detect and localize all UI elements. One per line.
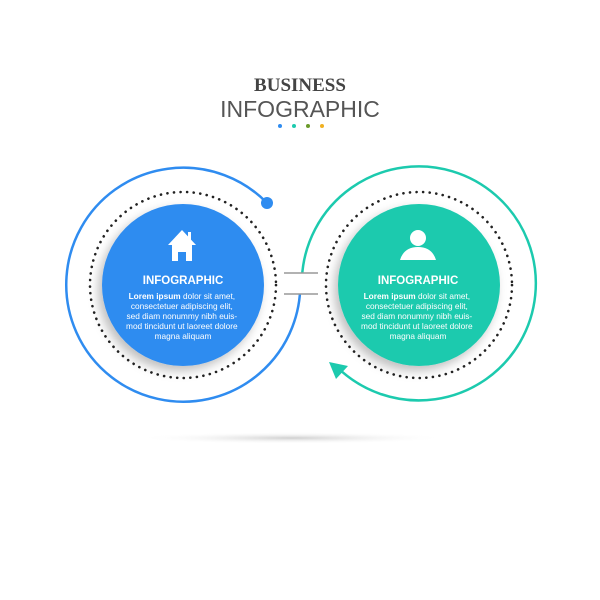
title: INFOGRAPHIC — [220, 96, 380, 122]
dotted ring left — [90, 192, 276, 378]
panel: right teal circle — [338, 204, 500, 366]
dotted ring right — [326, 192, 512, 378]
text block right: mod tincidunt ut laoreet dolore — [361, 321, 473, 331]
text block right: Lorem ipsum dolor sit amet, — [364, 291, 470, 301]
connector — [284, 273, 318, 294]
text block right: magna aliquam — [390, 331, 446, 341]
text block left: magna aliquam — [155, 331, 211, 341]
icon: house — [168, 230, 196, 261]
panel: left blue circle — [102, 204, 264, 366]
text block left: mod tincidunt ut laoreet dolore — [126, 321, 238, 331]
heading right: INFOGRAPHIC — [378, 275, 458, 287]
text block right: consectetuer adipiscing elit, — [366, 301, 468, 311]
title dots — [278, 124, 324, 128]
heading left: INFOGRAPHIC — [143, 275, 223, 287]
text block right: sed diam nonummy nibh euis- — [362, 311, 472, 321]
blue arc — [66, 168, 300, 402]
text block left: sed diam nonummy nibh euis- — [126, 311, 237, 321]
icon: user — [400, 230, 436, 260]
text block left: consectetuer adipiscing elit, — [131, 301, 233, 311]
title: BUSINESS — [254, 75, 346, 96]
title — [220, 75, 380, 122]
shadow — [137, 432, 447, 444]
teal arc with arrow — [302, 166, 536, 400]
text block left: Lorem ipsum dolor sit amet, — [129, 291, 235, 301]
